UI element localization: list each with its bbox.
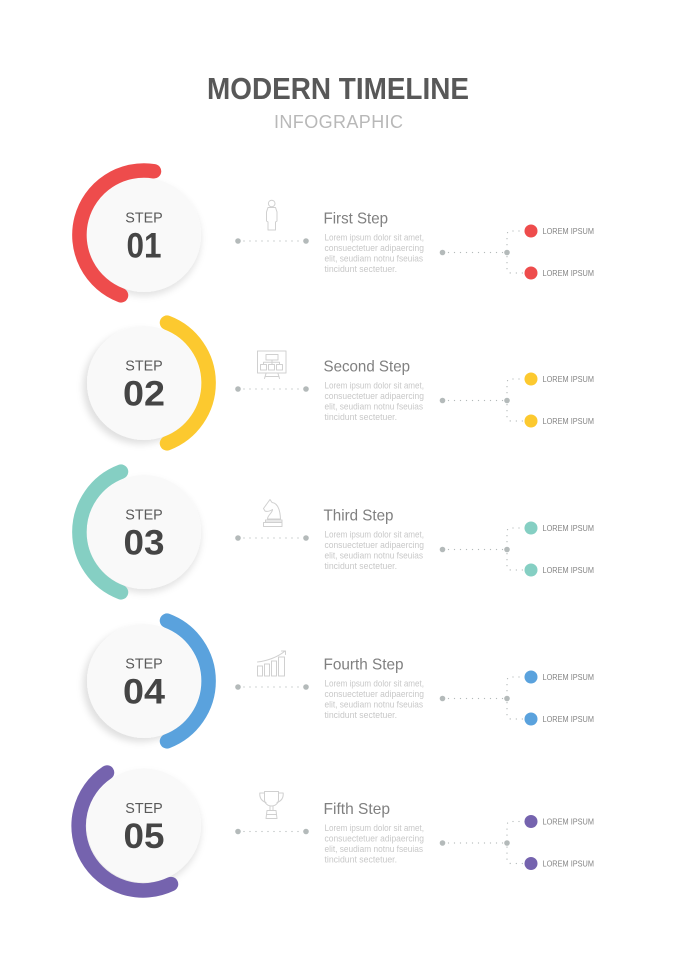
body text xyxy=(324,232,424,274)
option 1: LOREM IPSUM xyxy=(542,374,594,384)
option 2 xyxy=(524,857,594,870)
connector left xyxy=(235,238,309,244)
body text: elit, seudiam notnu fseuias xyxy=(324,700,423,710)
option 2 xyxy=(524,414,594,428)
body text: consuectetuer adipaercing xyxy=(324,689,424,699)
heading: First Step xyxy=(324,210,388,227)
step 5 xyxy=(79,768,594,890)
step 3 badge xyxy=(79,472,201,592)
heading: Third Step xyxy=(324,507,394,524)
branch connector xyxy=(440,231,525,273)
option 2: LOREM IPSUM xyxy=(542,565,594,575)
step 5 badge: STEP xyxy=(125,800,163,817)
body text: Lorem ipsum dolor sit amet, xyxy=(324,232,424,242)
option 1: LOREM IPSUM xyxy=(542,523,594,533)
body text: consuectetuer adipaercing xyxy=(324,391,424,401)
heading: Fourth Step xyxy=(324,656,404,673)
heading: Second Step xyxy=(324,358,410,375)
icon: person xyxy=(266,200,277,230)
title: MODERN TIMELINE xyxy=(207,72,469,106)
connector left xyxy=(235,535,309,541)
step 4 xyxy=(87,621,594,741)
body text: tincidunt sectetuer. xyxy=(324,854,397,864)
icon: trophy xyxy=(260,792,283,818)
body text: tincidunt sectetuer. xyxy=(324,264,397,274)
body text: consuectetuer adipaercing xyxy=(324,834,424,844)
step 3 xyxy=(79,472,594,592)
body text: elit, seudiam notnu fseuias xyxy=(324,254,423,264)
icon: chess knight xyxy=(264,500,282,526)
subtitle: INFOGRAPHIC xyxy=(274,112,403,132)
body text xyxy=(324,530,424,571)
step 2 xyxy=(87,323,594,443)
body text: elit, seudiam notnu fseuias xyxy=(324,550,423,560)
option 2: LOREM IPSUM xyxy=(542,416,594,426)
step 4 badge: 04 xyxy=(123,672,166,711)
body text: tincidunt sectetuer. xyxy=(324,561,397,571)
branch connector xyxy=(440,528,525,570)
branch connector xyxy=(440,677,525,719)
option 1: LOREM IPSUM xyxy=(542,226,594,236)
option 1 xyxy=(524,522,594,534)
body text: Lorem ipsum dolor sit amet, xyxy=(324,678,424,688)
step 1 badge: STEP xyxy=(125,210,163,227)
step 5 badge: 05 xyxy=(124,817,164,856)
step 2 badge: 02 xyxy=(123,374,165,413)
body text: Lorem ipsum dolor sit amet, xyxy=(324,530,424,540)
step 4 badge: STEP xyxy=(125,656,163,673)
step 1 xyxy=(79,171,594,295)
option 2 xyxy=(524,712,594,726)
step 4 badge xyxy=(87,621,209,741)
icon: presentation board xyxy=(258,351,286,378)
step 3 badge: 03 xyxy=(124,523,164,562)
body text: consuectetuer adipaercing xyxy=(324,243,424,253)
step 1 badge: 01 xyxy=(126,226,162,265)
connector left xyxy=(235,684,309,690)
option 1 xyxy=(524,670,594,684)
branch connector xyxy=(440,379,525,421)
body text: Lorem ipsum dolor sit amet, xyxy=(324,823,424,833)
option 1 xyxy=(524,815,594,828)
connector left xyxy=(235,829,309,834)
branch connector xyxy=(440,822,525,864)
body text: elit, seudiam notnu fseuias xyxy=(324,402,423,412)
body text: consuectetuer adipaercing xyxy=(324,540,424,550)
option 2 xyxy=(524,266,594,280)
option 1 xyxy=(524,224,594,238)
option 1 xyxy=(524,372,594,386)
step 2 badge xyxy=(87,323,209,443)
option 2: LOREM IPSUM xyxy=(542,268,594,278)
icon: growth chart xyxy=(258,651,286,676)
body text: elit, seudiam notnu fseuias xyxy=(324,844,423,854)
connector left xyxy=(235,386,309,392)
heading: Fifth Step xyxy=(324,801,390,818)
body text xyxy=(324,380,424,422)
step 5 badge xyxy=(79,768,201,890)
body text xyxy=(324,678,424,720)
option 2: LOREM IPSUM xyxy=(542,858,594,868)
option 1: LOREM IPSUM xyxy=(542,816,594,826)
body text xyxy=(324,823,424,864)
body text: Lorem ipsum dolor sit amet, xyxy=(324,380,424,390)
step 2 badge: STEP xyxy=(125,358,163,375)
step 1 badge xyxy=(79,171,201,295)
step 3 badge: STEP xyxy=(125,507,163,524)
option 2 xyxy=(524,564,594,576)
body text: tincidunt sectetuer. xyxy=(324,710,397,720)
option 2: LOREM IPSUM xyxy=(542,714,594,724)
option 1: LOREM IPSUM xyxy=(542,672,594,682)
body text: tincidunt sectetuer. xyxy=(324,412,397,422)
